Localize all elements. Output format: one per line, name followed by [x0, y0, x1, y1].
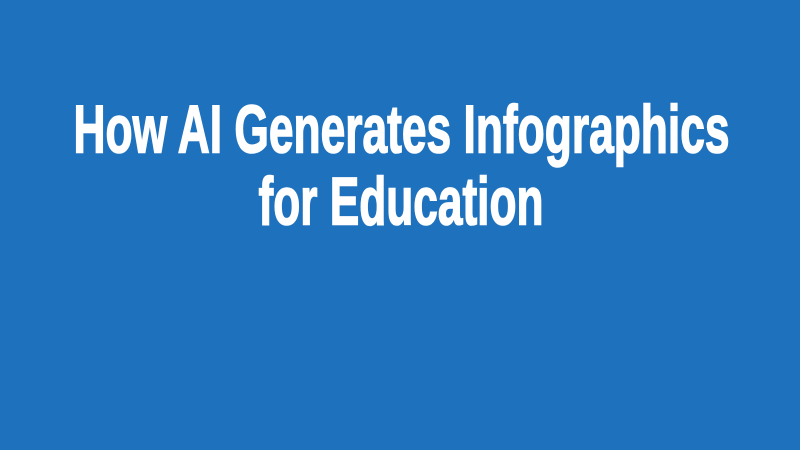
title: for Education	[258, 164, 544, 240]
title	[74, 92, 730, 240]
